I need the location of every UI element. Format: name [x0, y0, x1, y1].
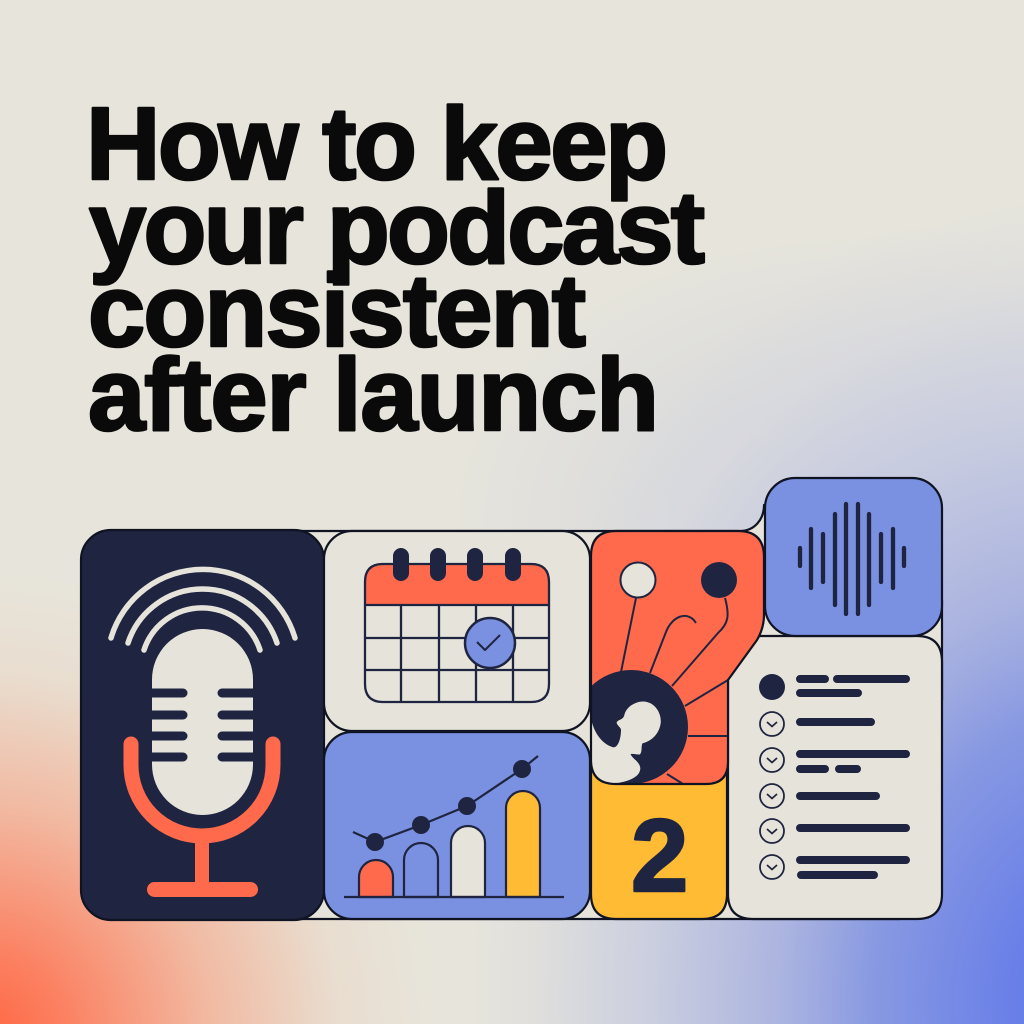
waveform bars — [800, 504, 904, 614]
navy node — [701, 562, 737, 598]
panel: number two — [591, 760, 727, 919]
cream node — [620, 562, 656, 598]
cream backing band — [110, 505, 942, 919]
panel: growth chart — [324, 732, 590, 919]
check items — [760, 712, 784, 879]
icon: sound arcs — [111, 569, 295, 650]
number: 2 — [631, 798, 688, 913]
icon: microphone head — [147, 629, 258, 815]
icon: microphone stand — [131, 744, 273, 890]
list bars — [800, 679, 906, 875]
title: consistent — [88, 253, 586, 368]
title: your podcast — [89, 170, 705, 285]
icon: check badge — [465, 618, 515, 668]
chart axis — [344, 896, 564, 898]
chart bars — [359, 791, 540, 897]
panel: audience nodes — [574, 531, 764, 784]
title: after launch — [88, 337, 659, 452]
panel: checklist — [728, 636, 942, 919]
trend line — [353, 756, 538, 851]
calendar grid — [365, 564, 549, 702]
list bullet — [759, 674, 785, 700]
title — [86, 86, 705, 452]
illustration panel group — [81, 478, 942, 920]
panel: waveform — [765, 478, 942, 636]
panel outline — [591, 531, 764, 784]
calendar rings — [401, 556, 513, 573]
title: How to keep — [86, 86, 668, 201]
panel: microphone — [81, 530, 324, 920]
panel: calendar — [324, 531, 590, 731]
icon: head silhouette — [592, 670, 688, 783]
calendar header — [365, 564, 549, 605]
connector lines — [621, 598, 728, 784]
